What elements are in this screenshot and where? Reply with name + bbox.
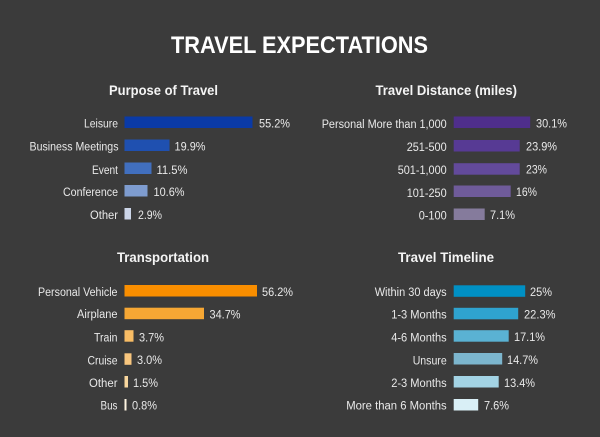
panel: travel timeline (346, 249, 556, 412)
bar: Personal More than 1,000 (322, 116, 567, 131)
bar: Leisure (84, 116, 290, 130)
bar: Personal More than 1,000: Personal More than 1,000 (322, 119, 447, 131)
bar: 101-250 (407, 186, 537, 200)
bar: Business Meetings (30, 140, 206, 154)
panel: travel distance (322, 82, 567, 222)
bar: Event (92, 162, 188, 177)
heading: purpose of travel: Purpose of Travel (109, 82, 218, 98)
bar: Business Meetings: Business Meetings (30, 142, 119, 154)
bar: 2-3 Months: 13.4% (504, 378, 535, 390)
bar: Bus: Bus (100, 400, 118, 412)
bar: More than 6 Months: 7.6% (484, 400, 509, 412)
bar: Other: 2.9% (138, 210, 162, 222)
title: TRAVEL EXPECTATIONS (171, 32, 428, 59)
bar: 4-6 Months: 4-6 Months (391, 332, 447, 344)
bar: Cruise (88, 353, 162, 368)
bar: 4-6 Months (391, 330, 545, 344)
bar: Within 30 days: Within 30 days (375, 287, 447, 299)
bar: 501-1,000: 501-1,000 (398, 165, 447, 177)
bar: 501-1,000: 23% (526, 164, 547, 176)
bar: Unsure: Unsure (413, 356, 447, 368)
bar: Personal Vehicle: 56.2% (262, 287, 293, 299)
bar: Within 30 days (375, 285, 552, 299)
bar: 101-250: 101-250 (407, 188, 447, 200)
bar: More than 6 Months: More than 6 Months (346, 400, 447, 412)
bar: Bus: 0.8% (132, 400, 157, 412)
bar: Personal Vehicle: Personal Vehicle (38, 287, 118, 299)
bar: Personal More than 1,000: 30.1% (536, 118, 567, 130)
bar: 0-100 (419, 208, 515, 222)
bar: Other (90, 208, 162, 222)
bar: Leisure: Leisure (84, 118, 118, 130)
bar: Within 30 days: 25% (530, 287, 552, 299)
bar: Cruise: Cruise (88, 356, 118, 368)
bar: Other (89, 376, 158, 390)
heading: transportation: Transportation (117, 249, 209, 265)
bar: Other: Other (89, 378, 118, 390)
heading: travel distance: Travel Distance (miles) (376, 82, 517, 98)
bar: Personal Vehicle (38, 285, 293, 299)
heading: travel timeline: Travel Timeline (398, 249, 494, 265)
bar: Cruise: 3.0% (137, 355, 162, 367)
bar: Event: Event (92, 165, 119, 177)
bar: Airplane: 34.7% (210, 310, 240, 322)
bar: Other: 1.5% (133, 378, 158, 390)
bar: 4-6 Months: 17.1% (514, 332, 545, 344)
bar: Conference: 10.6% (154, 187, 184, 199)
bar: 0-100: 0-100 (419, 210, 447, 222)
bar: 251-500: 251-500 (407, 142, 447, 154)
bar: Conference: Conference (63, 187, 118, 199)
bar: Train: Train (94, 332, 118, 344)
bar: Bus (100, 399, 157, 412)
bar: 101-250: 16% (516, 187, 537, 199)
bar: 1-3 Months (391, 308, 556, 322)
bar: 251-500: 23.9% (526, 142, 557, 154)
bar: Unsure: 14.7% (507, 355, 538, 367)
bar: Leisure: 55.2% (259, 118, 290, 130)
panel: transportation (38, 249, 293, 412)
bar: Business Meetings: 19.9% (174, 142, 206, 154)
panel: purpose of travel (30, 82, 290, 222)
bar: Other: Other (90, 210, 118, 222)
bar: Unsure (413, 353, 538, 368)
bar: 501-1,000 (398, 163, 547, 177)
bar: More than 6 Months (346, 399, 509, 412)
bar: Event: 11.5% (156, 165, 188, 177)
bar: 0-100: 7.1% (490, 210, 515, 222)
bar: Train: 3.7% (139, 332, 164, 344)
bar: Airplane: Airplane (77, 309, 118, 321)
bar: Airplane (77, 308, 240, 322)
bar: Conference (63, 185, 184, 199)
bar: 2-3 Months (391, 376, 535, 390)
bar: 1-3 Months: 22.3% (524, 310, 556, 322)
bar: 251-500 (407, 140, 557, 154)
bar: 2-3 Months: 2-3 Months (391, 378, 447, 390)
bar: Train (94, 330, 164, 344)
bar: 1-3 Months: 1-3 Months (391, 310, 447, 322)
